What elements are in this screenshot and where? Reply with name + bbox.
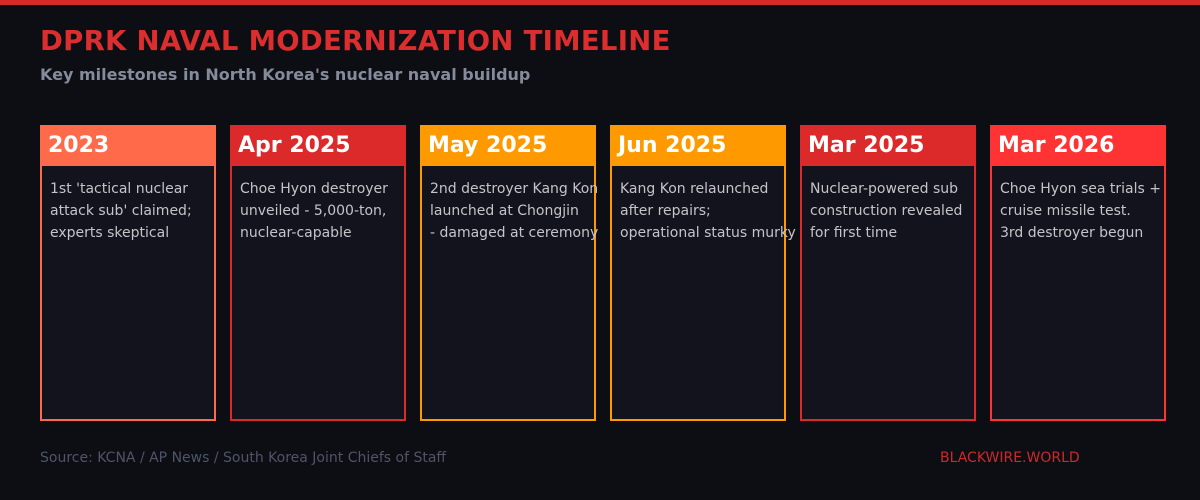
card: Apr 2025: nuclear-capable <box>240 225 352 241</box>
card: Mar 2026: 3rd destroyer begun <box>1000 225 1143 241</box>
card: Apr 2025: Choe Hyon destroyer <box>240 181 388 197</box>
card: May 2025: May 2025 <box>428 133 547 158</box>
card: Mar 2026: Choe Hyon sea trials + <box>1000 181 1161 197</box>
card: Mar 2025 <box>800 125 976 421</box>
card: Mar 2025: Nuclear-powered sub <box>810 181 958 197</box>
card: Mar 2026: Mar 2026 <box>998 133 1114 158</box>
card: 2023: 1st 'tactical nuclear <box>50 181 188 197</box>
card: Mar 2025: construction revealed <box>810 203 962 219</box>
card: Jun 2025: Jun 2025 <box>618 133 726 158</box>
card: Apr 2025: Apr 2025 <box>238 133 351 158</box>
subtitle: Key milestones in North Korea's nuclear naval buildup <box>40 65 530 84</box>
card: Mar 2026 <box>990 125 1166 421</box>
source footer: Source: KCNA / AP News / South Korea Joint Chiefs of Staff <box>40 450 446 466</box>
card: May 2025 <box>420 125 596 421</box>
card: Jun 2025: operational status murky <box>620 225 796 241</box>
card: Mar 2025: for first time <box>810 225 897 241</box>
card: Mar 2026: cruise missile test. <box>1000 203 1131 219</box>
card: Jun 2025 <box>610 125 786 421</box>
card: May 2025: - damaged at ceremony <box>430 225 598 241</box>
card: Mar 2025: Mar 2025 <box>808 133 924 158</box>
card: May 2025: launched at Chongjin <box>430 203 579 219</box>
card: Jun 2025: after repairs; <box>620 203 711 219</box>
title: DPRK NAVAL MODERNIZATION TIMELINE <box>40 25 671 57</box>
card: Jun 2025: Kang Kon relaunched <box>620 181 768 197</box>
card: Apr 2025 <box>230 125 406 421</box>
card: 2023: experts skeptical <box>50 225 169 241</box>
brand: BLACKWIRE.WORLD <box>940 450 1080 466</box>
card: 2023 <box>40 125 216 421</box>
card: Apr 2025: unveiled - 5,000-ton, <box>240 203 386 219</box>
card: 2023: attack sub' claimed; <box>50 203 192 219</box>
card: May 2025: 2nd destroyer Kang Kon <box>430 181 598 197</box>
card: 2023: 2023 <box>48 133 109 158</box>
